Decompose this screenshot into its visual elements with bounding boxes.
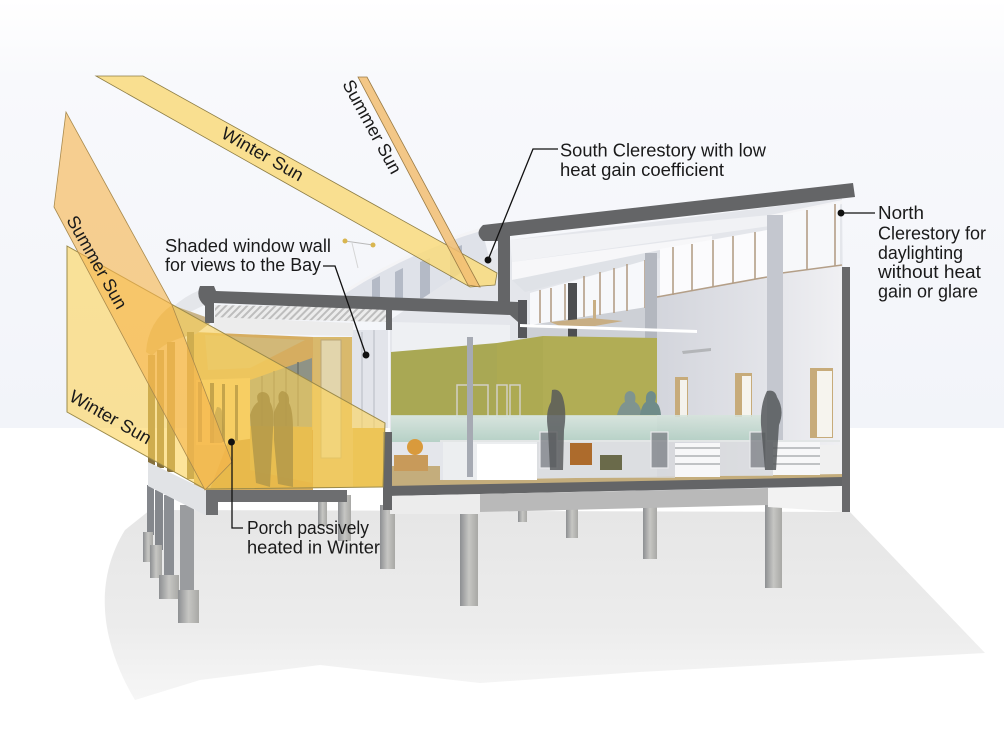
text: porch: Porch passively: [247, 518, 369, 538]
text: south clerestory: heat gain coefficient: [560, 160, 724, 180]
text: shaded window wall: [165, 236, 331, 275]
leader: north clerestory: [838, 210, 875, 216]
back wall: [657, 265, 842, 480]
glass partition: [391, 415, 761, 442]
ceiling beams: [510, 200, 842, 292]
text: north clerestory: daylighting: [878, 243, 963, 263]
people: woman right: [761, 391, 782, 470]
text: shaded window wall: Shaded window wall: [165, 236, 331, 256]
interior column: [467, 337, 473, 477]
text: south clerestory: South Clerestory with low: [560, 140, 767, 160]
people: woman left: [547, 390, 565, 470]
olive walls: [391, 336, 657, 417]
leader: shaded window wall: [323, 266, 369, 358]
small wind vane: [342, 238, 376, 268]
text: north clerestory: North: [878, 203, 924, 223]
porch figures: [213, 391, 293, 487]
porch roof underside: [214, 305, 388, 336]
label: summer sun top: Summer Sun: [338, 76, 406, 177]
text: north clerestory: Clerestory for: [878, 224, 986, 244]
porch interior: [194, 330, 388, 490]
piers: [143, 485, 782, 623]
interior shell: [390, 198, 845, 492]
sun beam: winter sun top: [96, 76, 497, 287]
porch columns: [148, 332, 194, 479]
text: south clerestory: [560, 140, 767, 180]
upper roof section: [478, 183, 855, 310]
sun beam: summer sun top: [358, 77, 480, 287]
porch screen: [250, 358, 312, 483]
floor slabs: [148, 267, 850, 515]
lower roof section: [198, 286, 518, 330]
curved roof behind: [173, 229, 500, 312]
text: shaded window wall: for views to the Bay: [165, 255, 321, 275]
leader: south clerestory: [485, 149, 558, 263]
porch curved fascia: [146, 305, 214, 356]
text: porch: [247, 518, 380, 558]
people in office: [617, 391, 661, 415]
sun beam: winter sun left: [67, 246, 385, 489]
text: north clerestory: without heat: [877, 262, 981, 282]
desks: [392, 432, 843, 488]
label: winter sun left: Winter Sun: [66, 386, 155, 448]
sun beam: summer sun left: [54, 112, 232, 490]
clerestory windows: [518, 202, 842, 440]
ground shadow: [105, 510, 985, 700]
text: porch: heated in Winter: [247, 538, 380, 558]
right wall windows: [675, 368, 833, 438]
text: north clerestory: gain or glare: [878, 282, 978, 302]
leader: porch: [229, 439, 243, 528]
text: north clerestory: [877, 203, 986, 302]
label: summer sun left: Summer Sun: [63, 212, 131, 312]
label: winter sun top: Winter Sun: [218, 123, 307, 185]
ceiling fan and light: [520, 300, 711, 354]
